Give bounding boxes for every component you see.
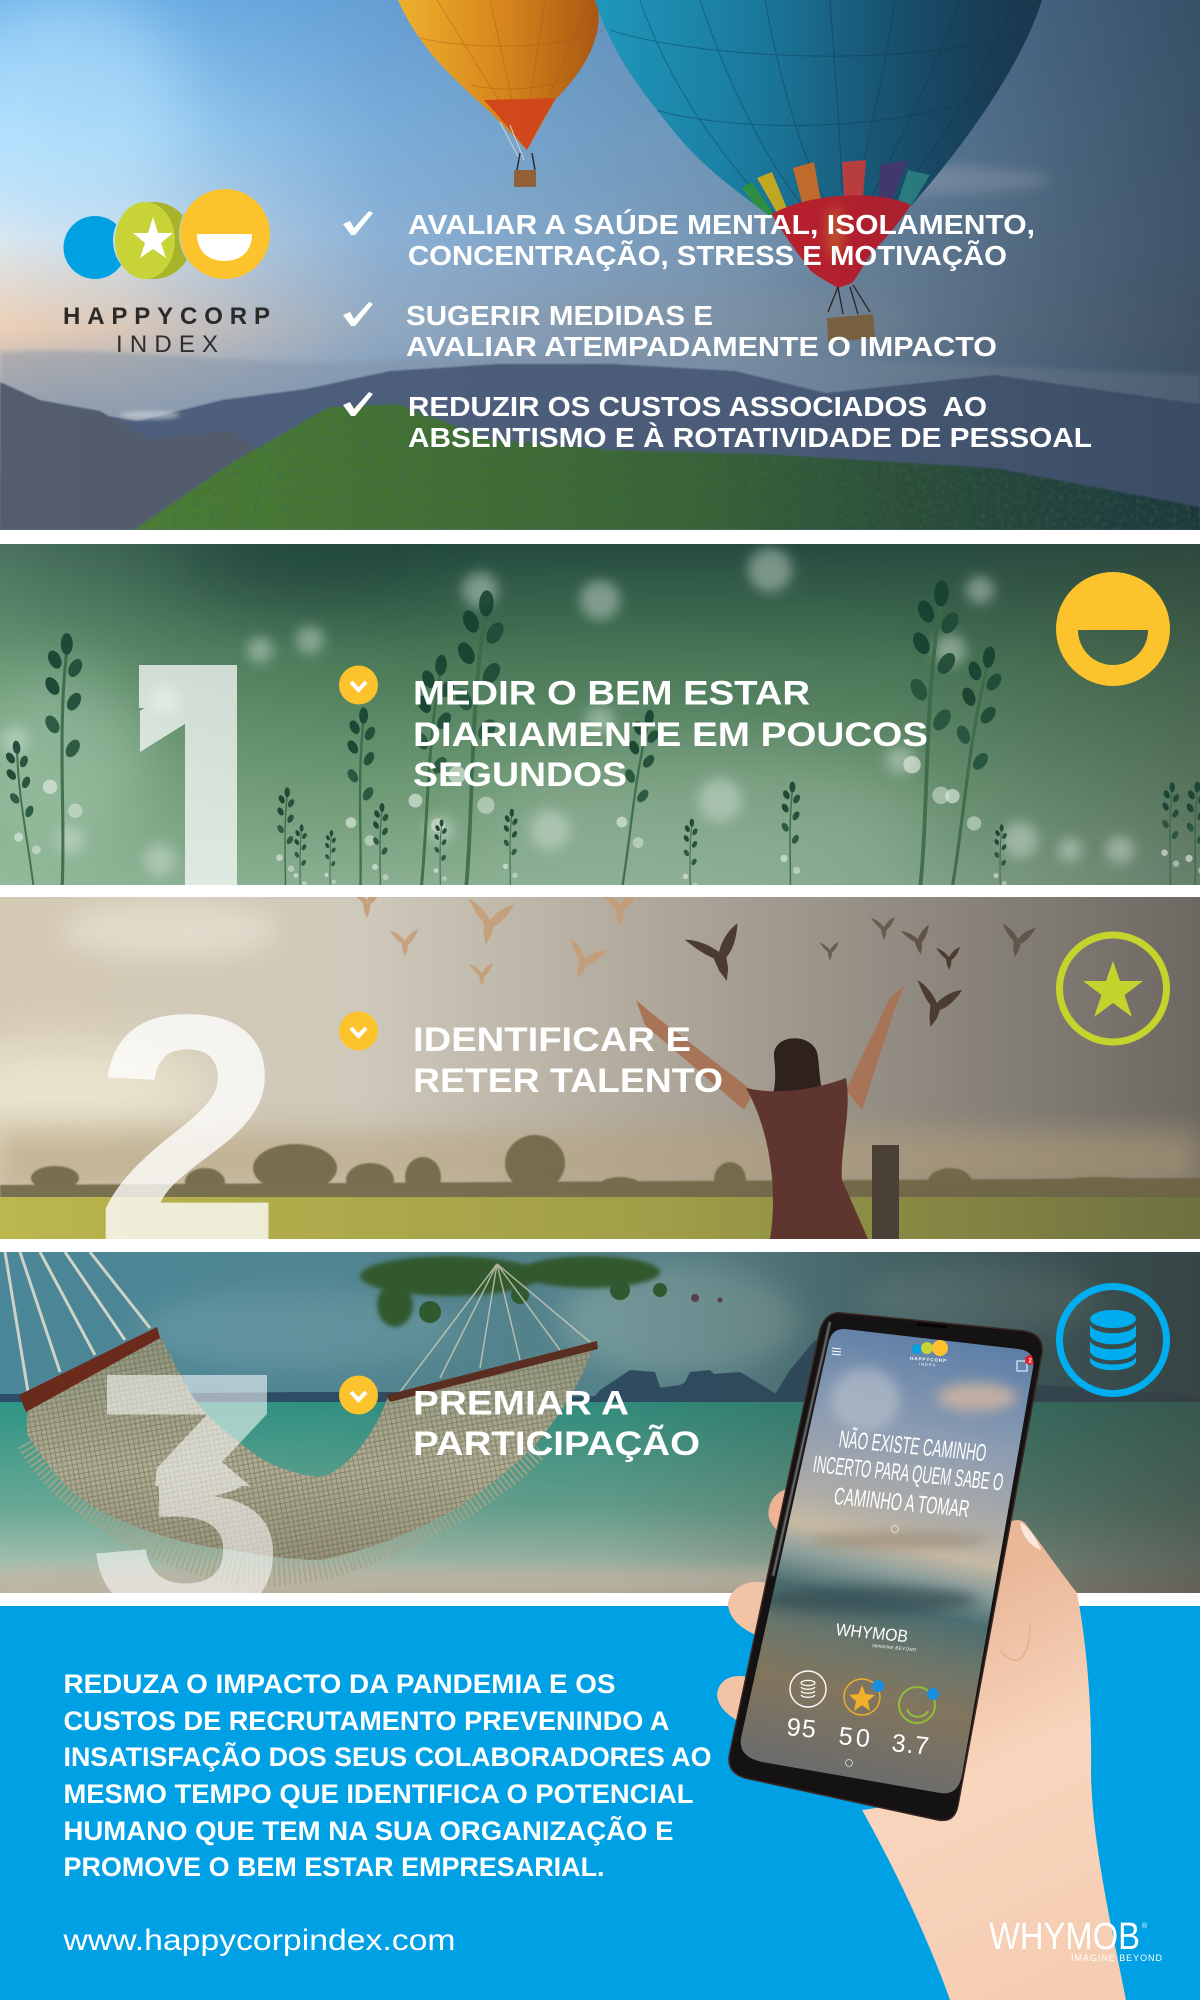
bullet: costs [343,392,1092,448]
icon: smile [1056,572,1170,686]
score: coins [785,1671,826,1744]
sunset field photo [0,886,1200,1239]
step 2 heading [413,1021,723,1100]
tree line [0,1135,1200,1205]
call to action text: REDUZA O IMPACTO DA PANDEMIA E OS [64,1669,616,1699]
panel: bottom call to action [0,1606,1200,2000]
step 1 heading: DIARIAMENTE EM POUCOS [413,716,928,754]
step 1 heading: MEDIR O BEM ESTAR [413,674,810,712]
call to action text: MESMO TEMPO QUE IDENTIFICA O POTENCIAL [64,1779,694,1809]
big number 2: 2 [94,949,282,1308]
islands [0,1340,1200,1402]
panel: step 3 [0,1252,1200,1692]
beach photo [0,1252,1200,1593]
logo: Whymob: WHYMOB [989,1916,1140,1958]
call to action text: INSATISFAÇÃO DOS SEUS COLABORADORES AO [64,1741,712,1772]
quote: INCERTO PARA QUEM SABE O [811,1451,1005,1496]
score: smile [890,1687,939,1761]
call to action text: HUMANO QUE TEM NA SUA ORGANIZAÇÃO E [64,1815,674,1846]
score: smile: 3.7 [890,1729,930,1761]
big number 1: 1 [114,586,325,1011]
balloon: blue [595,0,1042,342]
phone [720,1310,1050,1820]
call to action text: PROMOVE O BEM ESTAR EMPRESARIAL. [64,1852,604,1882]
news icon with badge [1017,1355,1035,1371]
call to action text: CUSTOS DE RECRUTAMENTO PREVENINDO A [64,1706,670,1736]
logo: Whymob: ® [1142,1922,1148,1930]
panel: hero [0,0,1200,530]
news icon with badge: 2 [1028,1358,1032,1364]
icon: database ring [1060,1286,1166,1394]
WHYMOB on screen: WHYMOB [834,1619,910,1646]
flower stems [1,579,1200,915]
icon: check [343,211,373,235]
logo: HappyCorp Index [63,189,270,358]
call to action text [64,1669,712,1882]
quote [811,1426,1005,1523]
hand holding phone [717,1310,1126,2000]
chevron badge [339,1376,378,1414]
hand [717,1488,1126,2000]
info icons [846,1526,898,1766]
step 2 heading: IDENTIFICAR E [413,1021,691,1059]
score: star: 50 [837,1722,871,1753]
balloon skirt [772,195,911,288]
balloon: orange [398,0,604,187]
chevron badge [339,1012,378,1050]
icon: star ring [1060,935,1166,1042]
logo subtitle: INDEX [116,331,218,358]
bullet: mental health: CONCENTRAÇÃO, STRESS E MOTIVAÇÃO [408,240,1007,271]
step 3 heading: PREMIAR A [413,1384,629,1422]
website url: www.happycorpindex.com [62,1924,456,1957]
phone speaker [917,1324,947,1327]
menu icon [832,1348,841,1355]
score: star [837,1679,884,1753]
fence post [872,1145,899,1239]
hammock [5,1252,598,1570]
quote: NÃO EXISTE CAMINHO [837,1426,988,1467]
app logo: INDEX [919,1361,936,1368]
bullet: measures: AVALIAR ATEMPADAMENTE O IMPACTO [406,331,997,362]
icon: check [343,392,373,416]
chevron badge [339,666,378,704]
big number 1 [139,665,237,885]
score: coins: 95 [785,1713,817,1744]
logo mark [64,189,270,279]
bullet: measures: SUGERIR MEDIDAS E [406,300,713,331]
step 1 heading: SEGUNDOS [413,756,627,794]
step 1 heading [413,674,928,794]
tree foliage [360,1256,722,1327]
app logo: HAPPYCORP [910,1356,946,1363]
mountains [0,351,1200,530]
hero sky photo [0,0,1200,530]
birds [356,897,1036,1027]
flower field photo [0,544,1200,885]
bullet: costs: ABSENTISMO E À ROTATIVIDADE DE PESSOAL [408,422,1092,453]
panel: step 2 [0,886,1200,1308]
WHYMOB on screen: IMAGINE BEYOND [872,1643,917,1652]
app logo [910,1340,948,1368]
screen edge highlight [773,1322,830,1576]
logo wordmark: HAPPYCORP [63,303,270,330]
step 3 heading: PARTICIPAÇÃO [413,1425,700,1463]
hero right tint [398,0,1200,530]
bullet: mental health: AVALIAR A SAÚDE MENTAL, ISOLAMENTO, [408,209,1035,240]
logo: Whymob: IMAGINE BEYOND [1071,1953,1162,1963]
bullet: mental health [343,209,1035,271]
panel: step 1 [0,520,1200,1011]
step 3 heading [413,1384,700,1463]
bullet: measures [343,302,996,356]
quote: CAMINHO A TOMAR [832,1483,971,1523]
big number 3: 3 [88,1307,286,1692]
phone screen [720,1310,1050,1810]
step 2 heading: RETER TALENTO [413,1062,723,1100]
woman with raised arms [636,985,905,1239]
bullet: costs: REDUZIR OS CUSTOS ASSOCIADOS AO [408,391,987,422]
icon: check [343,302,373,326]
